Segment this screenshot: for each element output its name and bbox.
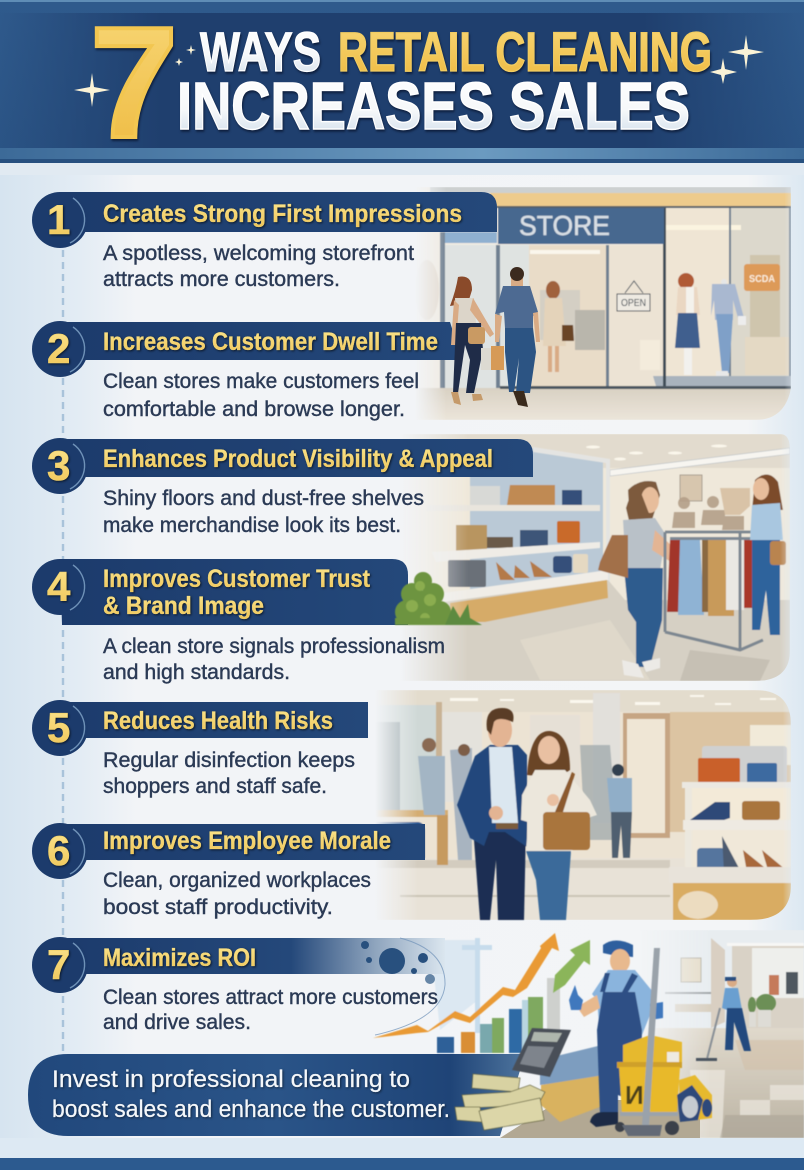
body text 7	[103, 986, 438, 1034]
header band	[0, 0, 804, 175]
illustration: couple in mall	[375, 690, 791, 920]
wooden table	[375, 810, 448, 865]
ghost shopper	[428, 261, 439, 319]
body text 4: A clean store signals professionalism	[103, 635, 445, 658]
heading 4: & Brand Image	[103, 592, 264, 620]
soda sign: SCDA	[749, 274, 775, 285]
illustration: store backdrop behind cleaner	[640, 930, 804, 1138]
foreground shoppers on storefront	[450, 267, 540, 407]
number 6: 6	[47, 827, 70, 874]
heading 3: Enhances Product Visibility & Appeal	[103, 445, 493, 473]
body text 4: and high standards.	[103, 661, 290, 684]
footer band	[0, 1138, 804, 1170]
banner 7	[32, 937, 445, 1035]
shopper with bag	[598, 480, 671, 678]
back shelves	[530, 715, 580, 845]
background shoppers	[418, 738, 632, 860]
number 1: 1	[47, 196, 70, 243]
cash stacks	[455, 1074, 545, 1130]
shelf 3	[443, 554, 608, 622]
mop handle	[622, 948, 662, 1136]
shelf 2	[446, 520, 600, 560]
green growth arrow	[553, 940, 590, 993]
call to action text: Invest in professional cleaning to	[52, 1066, 410, 1093]
heading 5: Reduces Health Risks	[103, 707, 333, 735]
plant	[395, 572, 482, 625]
body text 1: attracts more customers.	[103, 268, 340, 291]
bucket and cart	[615, 1035, 682, 1135]
number 5: 5	[47, 704, 70, 751]
title line two: INCREASES SALES	[177, 69, 690, 144]
man in blue shirt	[495, 267, 540, 407]
clothing rack	[665, 532, 763, 650]
banner 6	[32, 823, 425, 879]
illustration: storefront	[415, 187, 791, 420]
left shop	[387, 705, 436, 810]
cleaner with cart	[569, 940, 712, 1136]
couple	[457, 708, 597, 920]
bars	[437, 978, 560, 1053]
heading 6: Improves Employee Morale	[103, 827, 391, 855]
call to action banner	[28, 1054, 525, 1136]
body text 1	[103, 242, 414, 291]
mannequin in sweater	[711, 279, 746, 376]
body text 6: boost staff productivity.	[103, 896, 333, 919]
number 2: 2	[47, 325, 70, 372]
bucket and cart: И	[625, 1080, 644, 1110]
books and crate	[540, 1046, 605, 1122]
cleaner	[569, 940, 663, 1127]
title line one: WAYS	[200, 20, 321, 83]
virus icon	[361, 941, 435, 984]
ground under cart	[500, 1100, 700, 1138]
banner 3	[32, 438, 533, 494]
open sign	[617, 281, 650, 311]
heading 7: Maximizes ROI	[103, 944, 256, 972]
title	[90, 0, 712, 171]
body text 3: make merchandise look its best.	[103, 514, 401, 537]
potted plants	[748, 994, 776, 1027]
title numeral 7: 7	[90, 0, 178, 171]
store sign: STORE	[519, 210, 610, 241]
shelf 1	[470, 484, 600, 512]
body text 7: and drive sales.	[103, 1011, 251, 1034]
body text 5	[103, 749, 355, 798]
vacuum	[677, 1075, 712, 1122]
growth chart	[373, 933, 590, 1053]
body text 4	[103, 635, 445, 684]
arc outline	[375, 938, 445, 1035]
floor	[375, 858, 791, 920]
dashed connector line	[62, 250, 64, 1054]
body text 1: A spotless, welcoming storefront	[103, 242, 414, 265]
shelf display	[669, 746, 791, 920]
number 4: 4	[47, 563, 71, 610]
mannequin with skirt	[675, 273, 700, 375]
call to action text	[52, 1066, 450, 1123]
sparkles	[74, 35, 764, 107]
banner 5	[32, 700, 368, 756]
back shopper	[543, 281, 574, 372]
staff member	[750, 474, 786, 635]
floor	[400, 580, 790, 681]
money, calculator and books	[455, 1028, 605, 1130]
call to action text: boost sales and enhance the customer.	[52, 1096, 450, 1123]
background shoppers	[672, 488, 750, 530]
woman in sweater	[521, 731, 597, 920]
number 3: 3	[47, 442, 70, 489]
man in blazer	[457, 708, 527, 920]
heading 1: Creates Strong First Impressions	[103, 200, 462, 228]
heading 4: Improves Customer Trust	[103, 565, 371, 593]
woman with shopping bags	[450, 277, 504, 405]
body text 5: Regular disinfection keeps	[103, 749, 355, 772]
body text 6	[103, 869, 371, 919]
body text 7: Clean stores attract more customers	[103, 986, 438, 1009]
store sign	[498, 208, 664, 244]
body text 6: Clean, organized workplaces	[103, 869, 371, 892]
body text 3	[103, 487, 424, 537]
background cleaner mopping	[696, 977, 776, 1061]
number 7: 7	[47, 941, 70, 988]
body text 3: Shiny floors and dust-free shelves	[103, 487, 424, 510]
soda sign	[744, 264, 780, 291]
banner 1	[32, 192, 497, 248]
illustration: product aisle	[400, 434, 790, 681]
heading 4	[103, 565, 371, 620]
body text 2: comfortable and browse longer.	[103, 398, 405, 421]
body text 5: shoppers and staff safe.	[103, 775, 327, 798]
body text 2: Clean stores make customers feel	[103, 370, 419, 393]
banner 2	[32, 321, 462, 377]
banner 4	[32, 559, 408, 625]
heading 2: Increases Customer Dwell Time	[103, 328, 438, 356]
orange growth arrow	[373, 933, 559, 1038]
open sign: OPEN	[621, 298, 646, 309]
calculator	[512, 1028, 571, 1077]
body text 2	[103, 370, 419, 421]
